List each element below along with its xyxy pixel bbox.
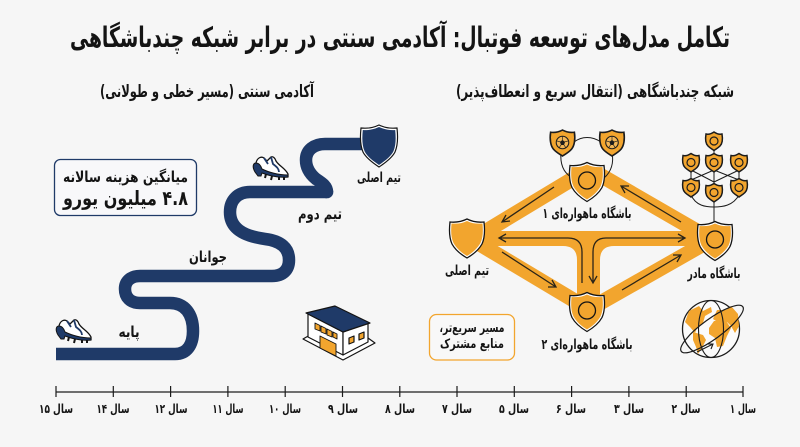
callout: faster route, shared resources: منابع مشترک <box>440 337 504 352</box>
timeline labels: سال ۷ <box>442 401 472 416</box>
timeline labels: سال ۶ <box>556 401 586 416</box>
path end cap <box>321 186 333 198</box>
orange network links <box>478 175 705 305</box>
timeline labels: سال ۱۵ <box>39 401 73 416</box>
winding path <box>56 144 368 354</box>
label: main team: تیم اصلی <box>357 170 401 186</box>
icon: small shield with ball, right <box>600 130 624 156</box>
panel: multi-club network <box>430 130 749 360</box>
label: satellite club 2: باشگاه ماهواره‌ای ۲ <box>542 336 632 353</box>
timeline labels: سال ۱۱ <box>212 401 244 416</box>
shield: main team <box>449 219 485 258</box>
label: parent club: باشگاه مادر <box>687 265 740 282</box>
label: youth: جوانان <box>189 248 227 266</box>
panel: traditional academy path <box>54 125 401 360</box>
timeline <box>39 386 756 416</box>
timeline labels <box>39 401 756 416</box>
shield: satellite club 2 <box>569 292 605 332</box>
icon: upper boot <box>253 157 288 180</box>
timeline labels: سال ۳ <box>614 401 644 416</box>
icon: globe <box>675 299 749 359</box>
timeline labels: سال ۵ <box>499 401 529 416</box>
timeline labels: سال ۱۴ <box>97 401 130 416</box>
timeline labels: سال ۲ <box>672 401 700 416</box>
callout: average annual cost <box>54 160 196 216</box>
icon: lower boot <box>56 320 91 343</box>
icon: youth club tree shields <box>683 132 747 202</box>
label: foundation: پایه <box>118 323 140 342</box>
label: satellite club 1: باشگاه ماهواره‌ای ۱ <box>542 205 632 222</box>
shield: parent club <box>697 222 733 260</box>
callout: faster route, shared resources: مسیر سریع‌تر، <box>440 321 504 336</box>
icon: academy building <box>303 306 375 360</box>
timeline labels: سال ۱۰ <box>269 401 301 416</box>
shield: satellite club 1 <box>569 162 605 202</box>
timeline labels: سال ۱۲ <box>154 401 188 416</box>
timeline labels: سال ۸ <box>385 401 415 416</box>
callout: average annual cost: ۴.۸ میلیون یورو <box>62 186 188 210</box>
callout: faster route, shared resources <box>430 314 514 360</box>
label: second team: تیم دوم <box>298 205 342 223</box>
icon: navy shield <box>360 125 398 167</box>
callout: average annual cost: میانگین هزینه سالانه <box>63 168 188 186</box>
icon: small shield with ball, left <box>550 130 575 156</box>
label: main team: تیم اصلی <box>445 263 489 279</box>
timeline axis and ticks <box>56 386 743 397</box>
heading: traditional academy: آکادمی سنتی (مسیر خطی و طولانی) <box>100 80 315 102</box>
tree connection lines <box>691 150 739 223</box>
arrows <box>499 186 685 290</box>
timeline labels: سال ۹ <box>328 401 358 416</box>
timeline labels: سال ۱ <box>730 401 756 416</box>
satellite connection lines <box>561 138 613 178</box>
